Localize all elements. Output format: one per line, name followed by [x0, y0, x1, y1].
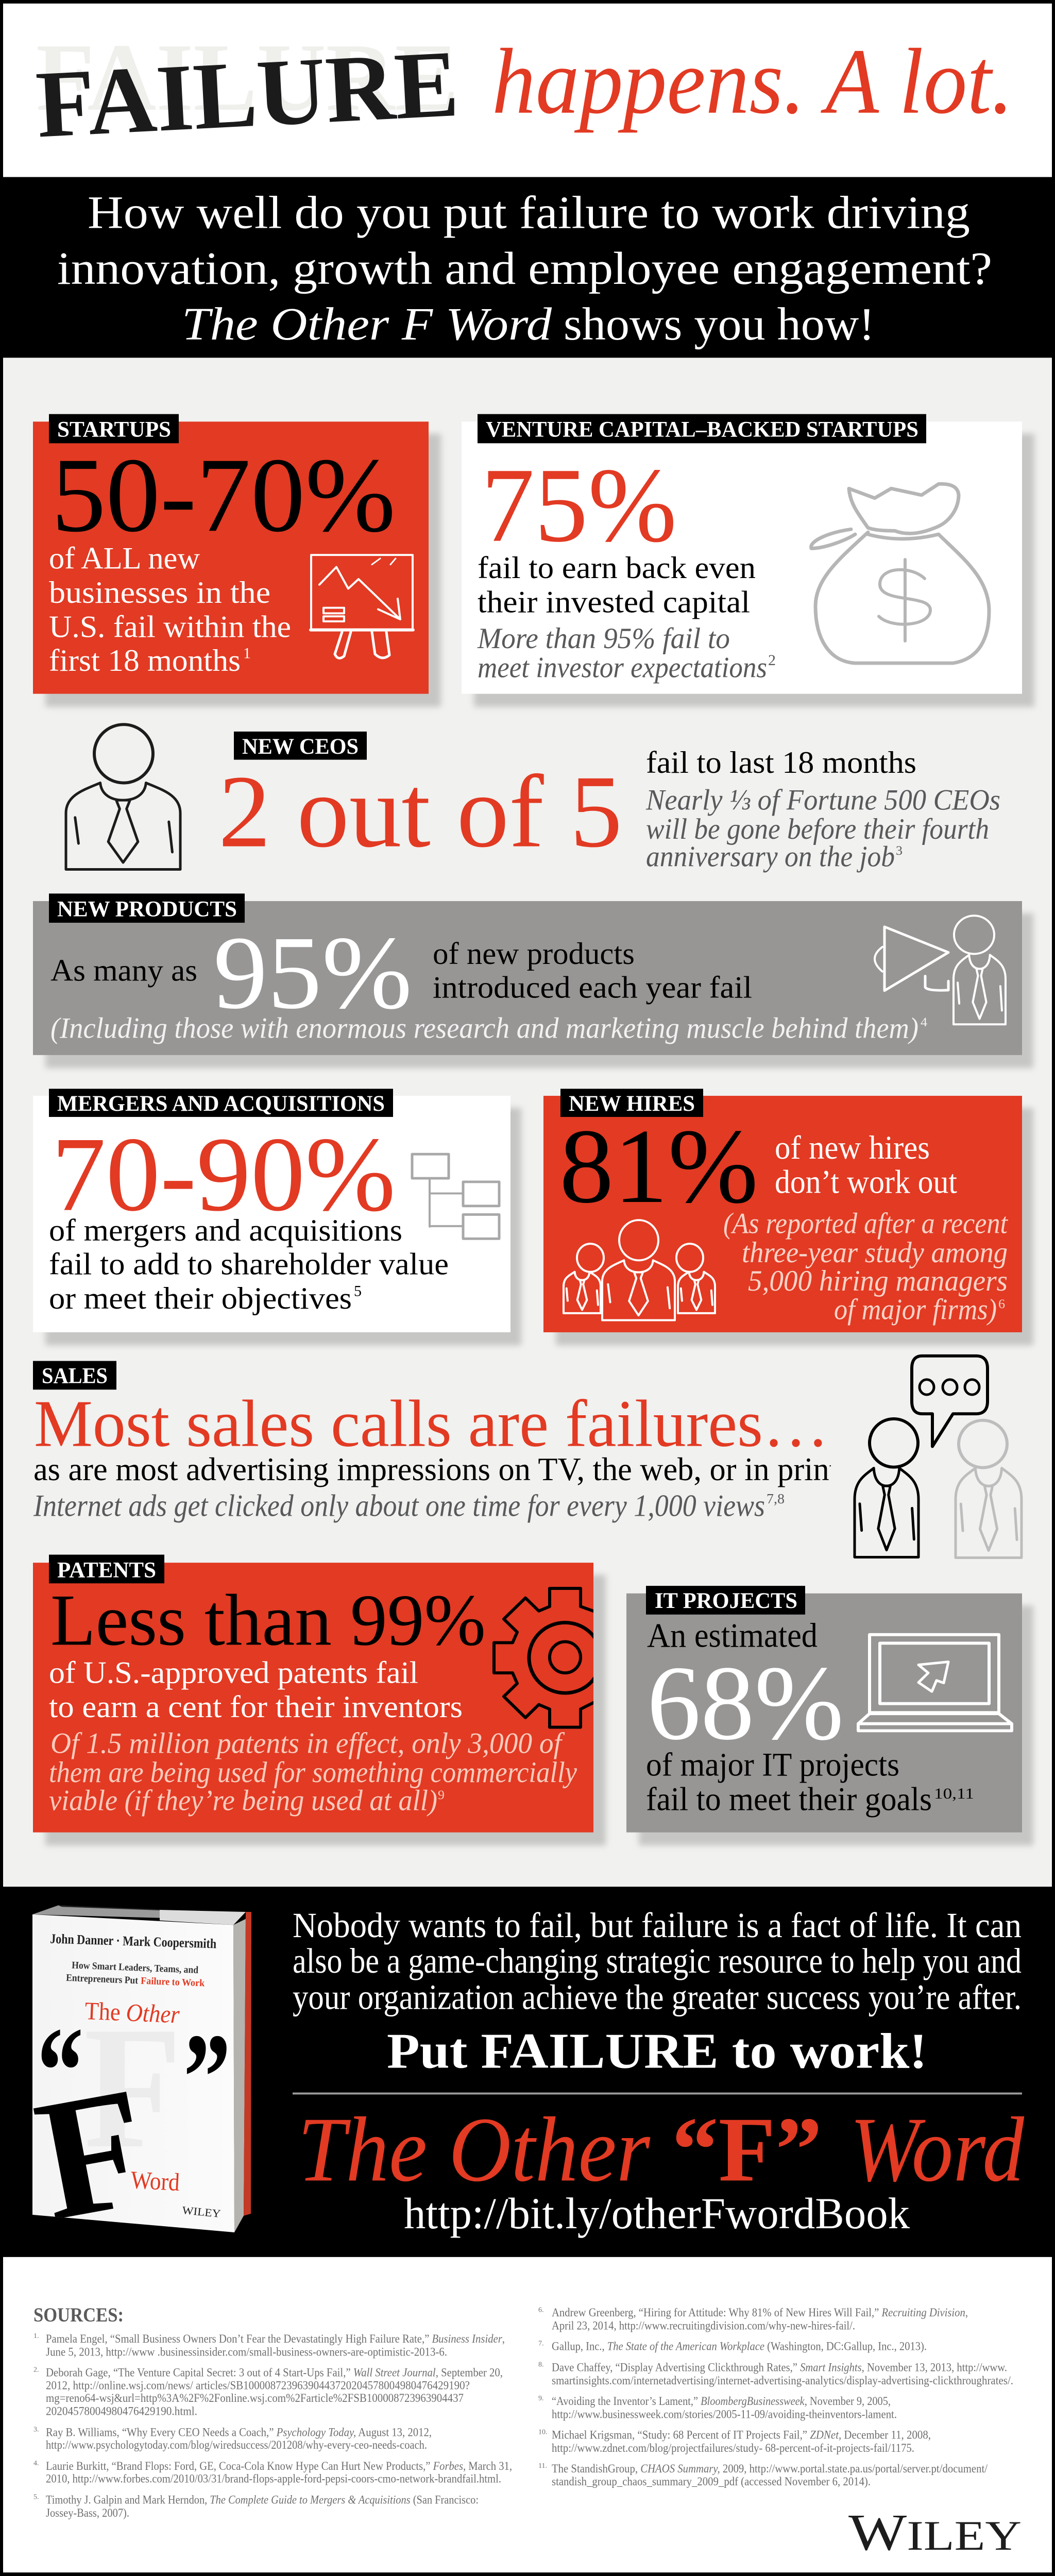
- sources column left: 5.: [33, 2493, 39, 2501]
- italic note: [49, 1727, 577, 1817]
- italic note: viable (if they’re being used at all): [49, 1785, 437, 1817]
- body text: of new hires: [775, 1130, 930, 1166]
- sources column right: Gallup, Inc., The State of the American Workplace (Washington, DC:Gallup, Inc., 2013).: [552, 2340, 927, 2353]
- opening quote: “: [37, 2002, 83, 2141]
- sources column right: http://www.zdnet.com/blog/projectfailures/study- 68-percent-of-it-projects-fail/1175.: [552, 2442, 914, 2455]
- body text: [477, 551, 776, 684]
- body text: to earn a cent for their inventors: [49, 1690, 463, 1724]
- label: sales: SALES: [42, 1364, 108, 1388]
- italic note: [723, 1208, 1009, 1326]
- book spine: [233, 1912, 251, 2232]
- icon: three people: [564, 1220, 715, 1320]
- sources column right: 6.: [538, 2306, 543, 2313]
- body text: of new products: [433, 937, 635, 971]
- sources column right: Michael Krigsman, “Study: 68 Percent of IT Projects Fail,” ZDNet, December 11, 2008,: [552, 2429, 931, 2442]
- icon: laptop with cursor: [858, 1635, 1012, 1731]
- icon: gear: [494, 1588, 601, 1727]
- icon: speech bubble: [912, 1356, 988, 1447]
- call to action band: [0, 1887, 1055, 2257]
- body text: Nearly ⅓ of Fortune 500 CEOs: [645, 784, 1000, 816]
- text: as many as: As many as: [50, 953, 197, 988]
- title: happens. A lot.: happens. A lot.: [492, 29, 1013, 133]
- sources column left: June 5, 2013, http://www .businessinsider.com/small-business-owners-are-optimistic-2013-6.: [46, 2346, 447, 2359]
- book title: the other: The Other: [84, 1997, 180, 2028]
- book title large: The Other: [298, 2098, 651, 2201]
- sources column right: 8.: [538, 2361, 543, 2368]
- panel: startups: [33, 414, 441, 707]
- book url: http://bit.ly/otherFwordBook: [404, 2189, 910, 2238]
- book subtitle: How Smart Leaders, Teams, and: [72, 1960, 199, 1976]
- body text: businesses in the: [49, 575, 270, 610]
- sources column right: http://www.businessweek.com/stories/2005-11-09/avoiding-theinventors-lament.: [552, 2408, 897, 2421]
- body text: of mergers and acquisitions: [49, 1213, 402, 1248]
- sources heading: SOURCES:: [33, 2303, 124, 2326]
- italic note: (Including those with enormous research and marketing muscle behind them): [50, 1012, 918, 1044]
- label: new products: NEW PRODUCTS: [57, 897, 237, 921]
- stat: 2 out of 5: 2 out of 5: [218, 755, 622, 869]
- stat: 50-70%: 50-70%: [52, 436, 396, 554]
- sources column left: http://www.psychologytoday.com/blog/wiredsuccess/201208/why-every-ceo-needs-coach.: [46, 2438, 427, 2452]
- sources column left: 3.: [33, 2426, 39, 2433]
- stat: 81%: 81%: [559, 1107, 758, 1225]
- sources column left: 4.: [33, 2459, 39, 2467]
- panel: patents: [33, 1555, 606, 1845]
- body text: 10,11: [934, 1786, 974, 1802]
- section: new CEOs: [66, 724, 1000, 873]
- panel: venture capital startups: [462, 414, 1034, 707]
- body text: fail to meet their goals: [646, 1781, 932, 1818]
- heading: put failure to work: Put FAILURE to work!: [387, 2024, 927, 2079]
- section: sales: [33, 1356, 1022, 1557]
- icon: org chart: [412, 1154, 499, 1239]
- body text: fail to earn back even: [478, 551, 756, 585]
- intro band: [0, 177, 1055, 358]
- sources column right: standish_group_chaos_summary_2009_pdf (accessed November 6, 2014).: [552, 2475, 871, 2488]
- sources column left: Deborah Gage, “The Venture Capital Secret: 3 out of 4 Start-Ups Fail,” Wall Street Journal, September 20,: [46, 2366, 503, 2379]
- ghost F: F: [84, 1991, 182, 2184]
- sources column right: April 23, 2014, http://www.recruitingdivision.com/why-new-hires-fail/.: [552, 2319, 855, 2332]
- stat: 95%: 95%: [213, 915, 412, 1031]
- header panel: [3, 4, 1052, 177]
- body text: as are most advertising impressions on TV, the web, or in print: [33, 1451, 838, 1487]
- stat: less than 99%: Less than 99%: [50, 1580, 486, 1661]
- intro line 2: innovation, growth and employee engagement?: [57, 243, 992, 294]
- italic note: them are being used for something commercially: [49, 1757, 577, 1789]
- book title large: “F”: [672, 2098, 822, 2201]
- stat: 75%: 75%: [481, 446, 677, 564]
- book title: word: Word: [130, 2166, 180, 2196]
- body text: meet investor expectations: [478, 652, 767, 684]
- label: startups: STARTUPS: [57, 417, 171, 442]
- icon: money bag: [811, 484, 989, 663]
- icon: black person: [855, 1419, 918, 1557]
- book title large: Word: [850, 2098, 1025, 2201]
- body text: first 18 months: [49, 643, 241, 678]
- call to action paragraph: [293, 1906, 1022, 2016]
- sources column left: Ray B. Williams, “Why Every CEO Needs a Coach,” Psychology Today, August 13, 2012,: [46, 2426, 432, 2439]
- italic note: Internet ads get clicked only about one time for every 1,000 views: [33, 1488, 765, 1523]
- icon: CEO figure: [66, 724, 180, 870]
- book top edge: [32, 1905, 246, 1925]
- italic note: Of 1.5 million patents in effect, only 3,000 of: [50, 1727, 565, 1759]
- body text: 5: [354, 1283, 362, 1300]
- body text: fail to add to shareholder value: [49, 1247, 449, 1281]
- sources column right: “Avoiding the Inventor’s Lament,” BloombergBusinessweek, November 9, 2005,: [552, 2395, 891, 2408]
- body text: [49, 1213, 449, 1316]
- sources column left: mg=reno64-wsj&url=http%3A%2F%2Fonline.wsj.com%2Farticle%2FSB100008723963904437: [46, 2392, 464, 2405]
- headline: most sales calls: Most sales calls are failures…: [34, 1387, 829, 1461]
- icon: falling chart on easel: [311, 555, 413, 658]
- label: new hires: NEW HIRES: [569, 1092, 695, 1116]
- body text: [775, 1130, 957, 1200]
- body text: 2: [768, 652, 776, 669]
- sources column left: 1.: [33, 2332, 39, 2340]
- big black F: F: [23, 2051, 162, 2257]
- italic note: of major firms): [834, 1294, 997, 1326]
- sources column right: Andrew Greenberg, “Hiring for Attitude: Why 81% of New Hires Will Fail,” Recruiting Division,: [552, 2306, 968, 2319]
- sources panel: [3, 2257, 1052, 2572]
- label: IT projects: IT PROJECTS: [655, 1589, 797, 1613]
- publisher logo: Wiley: WILEY: [848, 2504, 1022, 2562]
- body text: their invested capital: [478, 585, 750, 619]
- body text: will be gone before their fourth: [646, 814, 989, 845]
- sources column right: 9.: [538, 2394, 543, 2402]
- intro line 1: How well do you put failure to work driving: [88, 187, 970, 238]
- body text: [433, 937, 752, 1005]
- sources column right: Dave Chaffey, “Display Advertising Clickthrough Rates,” Smart Insights, November 13, 2013, http://www.: [552, 2361, 1007, 2374]
- book publisher: WILEY: [182, 2204, 222, 2220]
- body text: More than 95% fail to: [477, 622, 730, 655]
- body text: anniversary on the job: [646, 841, 895, 873]
- label: venture capital-backed startups: VENTURE CAPITAL–BACKED STARTUPS: [486, 417, 918, 442]
- sources column left: 2012, http://online.wsj.com/news/ articles/SB10000872396390443720204578004980476429190?: [46, 2379, 470, 2393]
- sources column right: 7.: [538, 2340, 543, 2347]
- stats background: [3, 358, 1052, 1887]
- closing quote: ”: [183, 2008, 231, 2147]
- book authors: John Danner · Mark Coopersmith: [50, 1931, 217, 1951]
- book subtitle red: Failure to Work: [141, 1975, 205, 1989]
- sources column right: [538, 2306, 1013, 2488]
- body text: 1: [243, 646, 251, 662]
- sources column right: The StandishGroup, CHAOS Summary, 2009, http://www.portal.state.pa.us/portal/server.pt/document/: [552, 2462, 988, 2476]
- body text: [646, 1747, 974, 1818]
- sources column left: 20204578004980476429190.html.: [46, 2405, 197, 2418]
- body text: of ALL new: [49, 541, 200, 575]
- body text: [49, 1655, 463, 1724]
- stat: 68%: 68%: [647, 1644, 844, 1762]
- italic note: 6: [998, 1296, 1005, 1311]
- icon: gray person: [956, 1420, 1022, 1557]
- label: new CEOs: NEW CEOS: [242, 734, 359, 759]
- label: patents: PATENTS: [57, 1558, 156, 1582]
- body text: or meet their objectives: [49, 1281, 352, 1316]
- body text: fail to last 18 months: [646, 745, 916, 780]
- sources column right: 10.: [538, 2428, 548, 2436]
- italic note: three-year study among: [742, 1237, 1008, 1269]
- intro line 3 italic: The Other F Word: [182, 298, 552, 350]
- sources column left: Pamela Engel, “Small Business Owners Don’t Fear the Devastatingly High Failure Rate,” Business Insider,: [46, 2332, 505, 2346]
- sources column left: Timothy J. Galpin and Mark Herndon, The Complete Guide to Mergers & Acquisitions (San Francisco:: [46, 2494, 479, 2506]
- book subtitle line 2: Entrepreneurs Put: [66, 1972, 139, 1986]
- body text: U.S. fail within the: [49, 609, 291, 644]
- body text: [645, 745, 1000, 873]
- sources column left: 2.: [33, 2366, 39, 2373]
- body text: of U.S.-approved patents fail: [49, 1655, 418, 1690]
- icon: person with megaphone: [875, 916, 1006, 1024]
- ghost word FAILURE: FAILURE: [36, 24, 458, 131]
- title: FAILURE: FAILURE: [33, 30, 461, 158]
- panel: IT projects: [626, 1586, 1033, 1845]
- body text: [49, 541, 291, 678]
- panel: new products: [33, 893, 1033, 1068]
- sources column left: 2010, http://www.forbes.com/2010/03/31/brand-flops-apple-ford-pepsi-coors-cmo-network-brandfail.html.: [46, 2472, 501, 2485]
- sources column left: Laurie Burkitt, “Brand Flops: Ford, GE, Coca-Cola Know Hype Can Hurt New Products,” Forbes, March 31,: [46, 2460, 512, 2473]
- panel: mergers and acquisitions: [33, 1089, 521, 1345]
- italic note: 9: [438, 1787, 445, 1802]
- sources column left: Jossey-Bass, 2007).: [46, 2506, 129, 2520]
- book title large: [298, 2098, 1025, 2201]
- intro line 3 roman: shows you how!: [564, 298, 875, 350]
- sources column left: [33, 2332, 512, 2520]
- panel: new hires: [543, 1089, 1033, 1345]
- body text: introduced each year fail: [433, 970, 752, 1005]
- italic note: 5,000 hiring managers: [748, 1265, 1008, 1297]
- text: an estimated: An estimated: [647, 1616, 818, 1654]
- italic note: (As reported after a recent: [723, 1208, 1009, 1240]
- body text: of major IT projects: [646, 1747, 899, 1783]
- body text: 3: [896, 843, 903, 858]
- label: mergers and acquisitions: MERGERS AND ACQUISITIONS: [57, 1092, 385, 1116]
- book cover: [32, 1905, 251, 2232]
- body text: don’t work out: [775, 1164, 957, 1200]
- italic note: 4: [921, 1014, 927, 1029]
- sources column right: 11.: [538, 2462, 547, 2469]
- italic note: 7,8: [767, 1490, 785, 1506]
- stat: 70-90%: 70-90%: [52, 1115, 396, 1233]
